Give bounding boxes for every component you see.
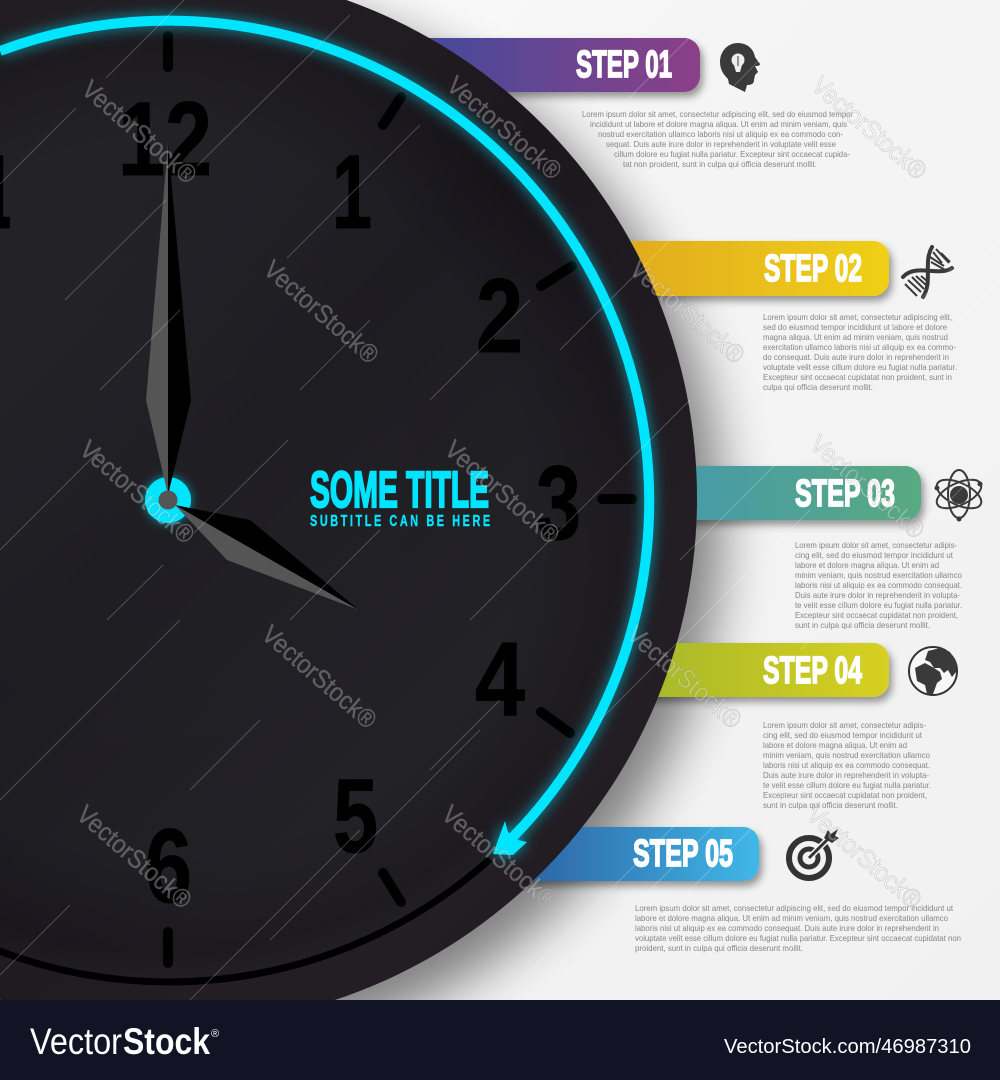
- bar: step 01: [400, 38, 700, 92]
- subtitle: SUBTITLE CAN BE HERE: [310, 512, 490, 530]
- step 02 text: sed do eiusmod tempor incididunt ut labore et dolore: [763, 322, 947, 332]
- clock drop shadow: [0, 0, 721, 1053]
- step 02 text: Lorem ipsum dolor sit amet, consectetur adipiscing elit,: [763, 312, 952, 322]
- arrow head: [493, 821, 527, 855]
- footer logo: Stock: [123, 1021, 210, 1062]
- hub centre: [158, 490, 178, 510]
- watermark texts: VectorStock®: [439, 434, 566, 550]
- step 04 label: STEP 04: [763, 650, 862, 692]
- watermark texts: VectorStock®: [804, 429, 931, 545]
- step 03 text: minim veniam, quis nostrud exercitation ullamco: [795, 570, 962, 580]
- step 05 text: laboris nisi ut aliquip ex ea commodo consequat. Duis aute irure dolor in reprehenderit in: [635, 923, 939, 933]
- step 04 text: cing elit, sed do eiusmod tempor incididunt ut: [763, 730, 923, 740]
- step 04 text: te velit esse cillum dolore eu fugiat nulla pariatur.: [763, 780, 931, 790]
- step 04 text: Duis aute irure dolor in reprehenderit in volupta-: [763, 770, 929, 780]
- minute hand: [146, 143, 191, 495]
- clock numerals: 2: [476, 258, 523, 375]
- step 01 text: nostrud exercitation ullamco laboris nisi ut aliquip ex ea commodo con-: [598, 129, 843, 139]
- clock face: [0, 0, 697, 1027]
- clock numerals: 1: [332, 134, 372, 251]
- step 04 text: Lorem ipsum dolor sit amet, consectetur adipis-: [763, 720, 926, 730]
- step 01 text: [582, 109, 853, 169]
- hub glow disc: [145, 477, 191, 523]
- watermark texts: VectorStock®: [621, 619, 748, 735]
- step 05 text: Lorem ipsum dolor sit amet, consectetur adipiscing elit, sed do eiusmod tempor incididunt ut: [635, 903, 954, 913]
- clock numerals: 6: [145, 808, 192, 925]
- step 01 label: STEP 01: [576, 44, 672, 86]
- step 03 label: STEP 03: [795, 473, 895, 515]
- step 03 text: Excepteur sint occaecat cupidatat non proident,: [795, 610, 958, 620]
- watermark texts: VectorStock®: [74, 434, 201, 550]
- step 04 text: minim veniam, quis nostrud exercitation ullamco: [763, 750, 930, 760]
- clock hands and hub: [145, 143, 359, 610]
- icon: head with light bulb: [720, 43, 760, 92]
- watermark texts: VectorStock®: [256, 619, 383, 735]
- title: SOME TITLE: [310, 461, 489, 518]
- step 01 text: tat non proident, sunt in culpa qui officia deserunt mollit.: [623, 159, 817, 169]
- icon: DNA helix: [903, 247, 952, 297]
- footer url: VectorStock.com/46987310: [724, 1036, 971, 1058]
- icon: target with arrow: [789, 829, 839, 878]
- black remaining arc: [0, 859, 490, 982]
- step 02 text: voluptate velit esse cillum dolore eu fugiat nulla pariatur.: [763, 362, 957, 372]
- clock numerals: 3: [536, 445, 581, 562]
- step 05 text: voluptate velit esse cillum dolore eu fugiat nulla pariatur. Excepteur sint occaecat cupidatat non: [635, 933, 961, 943]
- watermark texts: VectorStock®: [258, 254, 385, 370]
- step 03 text: Duis aute irure dolor in reprehenderit in volupta-: [795, 590, 960, 600]
- footer logo: ®: [211, 1028, 219, 1040]
- step 02 text: exercitation ullamco laboris nisi ut aliquip ex ea commo-: [763, 342, 956, 352]
- clock numerals: 4: [475, 621, 525, 738]
- step 01 text: Lorem ipsum dolor sit amet, consectetur adipiscing elit, sed do eiusmod tempor: [582, 109, 853, 119]
- step 01 text: incididunt ut labore et dolore magna aliqua. Ut enim ad minim veniam, quis: [590, 119, 847, 129]
- icon: globe: [909, 647, 957, 695]
- step 01 text: cillum dolore eu fugiat nulla pariatur. Excepteur sint occaecat cupida-: [614, 149, 850, 159]
- step 05 text: proident, sunt in culpa qui officia deserunt mollit.: [635, 943, 803, 953]
- watermark texts: VectorStock®: [624, 254, 751, 370]
- step 02 text: [763, 312, 957, 392]
- footer logo: Vector: [30, 1021, 122, 1062]
- step 02 label: STEP 02: [764, 248, 862, 290]
- step 03 text: te velit esse cillum dolore eu fugiat nulla pariatur.: [795, 600, 962, 610]
- step 03 text: Lorem ipsum dolor sit amet, consectetur adipis-: [795, 540, 957, 550]
- step 01 text: sequat. Duis aute irure dolor in reprehenderit in voluptate velit esse: [606, 139, 836, 149]
- clock tick marks: [168, 36, 632, 963]
- watermark texts: VectorStock®: [801, 799, 928, 915]
- footer logo: [30, 1021, 219, 1062]
- bar: step 05: [500, 827, 759, 881]
- step 05 text: [635, 903, 961, 953]
- step 03 text: labore et dolore magna aliqua. Ut enim ad: [795, 560, 939, 570]
- bar: step 04: [620, 643, 889, 697]
- bar: step 03: [650, 466, 921, 520]
- watermark texts: VectorStock®: [436, 799, 563, 915]
- step 05 label: STEP 05: [633, 833, 733, 875]
- clock numerals: 12: [118, 81, 212, 198]
- step 03 text: [795, 540, 962, 630]
- step 04 text: Excepteur sint occaecat cupidatat non proident,: [763, 790, 927, 800]
- footer bar: [0, 1000, 1000, 1080]
- watermark texts: VectorStock®: [71, 799, 198, 915]
- step 02 text: magna aliqua. Ut enim ad minim veniam, quis nostrud: [763, 332, 948, 342]
- step 02 text: culpa qui officia deserunt mollit.: [763, 382, 873, 392]
- watermark texts: VectorStock®: [441, 70, 568, 186]
- watermark texts: VectorStock®: [76, 74, 203, 190]
- step 04 text: sunt in culpa qui officia deserunt mollit.: [763, 800, 898, 810]
- hour hand: [175, 505, 359, 610]
- step 03 text: sunt in culpa qui officia deserunt mollit.: [795, 620, 930, 630]
- step bars: [400, 38, 921, 881]
- cyan progress ring with arrow: [0, 21, 649, 855]
- clock numerals: [0, 81, 581, 925]
- clock numerals: 5: [333, 758, 378, 875]
- icon: atom: [933, 470, 985, 522]
- step 03 text: cing elit, sed do eiusmod tempor incididunt ut: [795, 550, 954, 560]
- step 03 text: laboris nisi ut aliquip ex ea commodo consequat.: [795, 580, 962, 590]
- step 02 text: Excepteur sint occaecat cupidatat non proident, sunt in: [763, 372, 952, 382]
- step 02 text: do consequat. Duis aute irure dolor in reprehenderit in: [763, 352, 949, 362]
- step 04 text: laboris nisi ut aliquip ex ea commodo consequat.: [763, 760, 930, 770]
- watermark texts: VectorStock®: [806, 70, 933, 186]
- step 04 text: [763, 720, 931, 810]
- step 05 text: labore et dolore magna aliqua. Ut enim ad minim veniam, quis nostrud exercitation ullamco: [635, 913, 948, 923]
- step 04 text: labore et dolore magna aliqua. Ut enim ad: [763, 740, 907, 750]
- bar: step 02: [600, 241, 889, 296]
- watermark texts: [71, 70, 933, 915]
